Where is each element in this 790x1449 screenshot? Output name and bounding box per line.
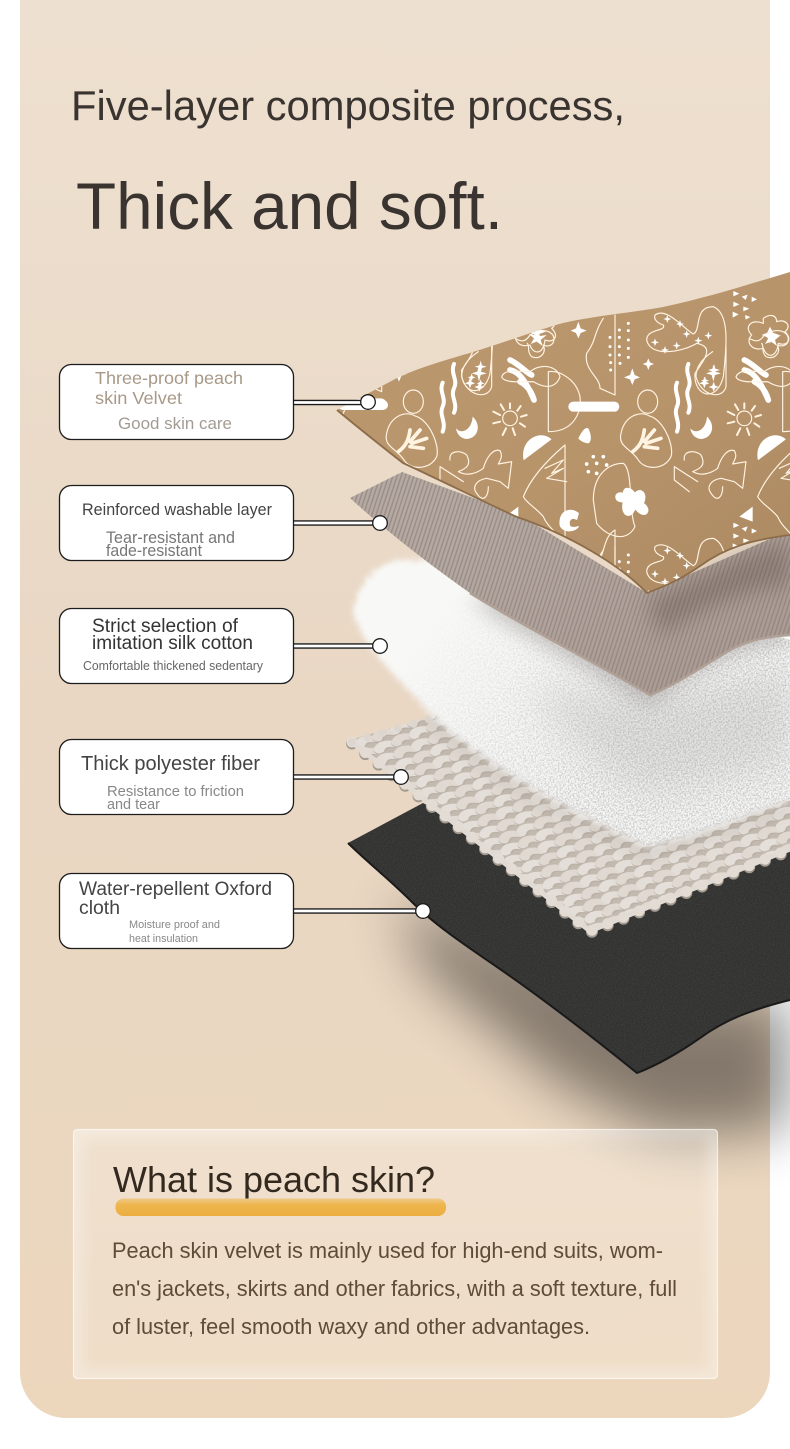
heading: What is peach skin?: [113, 1159, 435, 1200]
body copy: of luster, feel smooth waxy and other advantages.: [112, 1314, 590, 1339]
label card: silk cotton: Strict selection of: [92, 616, 239, 637]
label card: washable layer: Tear-resistant and: [106, 529, 235, 547]
layer 3: imitation silk cotton: [350, 555, 790, 850]
label card: Oxford cloth: heat insulation: [129, 933, 198, 945]
connector 4: [293, 770, 408, 784]
title: Thick and soft.: [76, 169, 503, 243]
layer 4: thick polyester knit: [350, 713, 790, 933]
cast shadow: [395, 900, 790, 1135]
body copy: en's jackets, skirts and other fabrics, with a soft texture, full: [112, 1276, 677, 1301]
label card: polyester fiber: Thick polyester fiber: [81, 753, 260, 775]
label card: silk cotton: imitation silk cotton: [92, 633, 253, 654]
label card: Oxford cloth: Water-repellent Oxford: [79, 879, 272, 900]
label card: silk cotton: Comfortable thickened sedentary: [83, 658, 263, 673]
heading underline: [116, 1198, 446, 1216]
connector 3: [293, 639, 387, 653]
label card: peach skin velvet: [60, 364, 294, 440]
five-layer fabric stack: [336, 272, 790, 1170]
label card: Oxford cloth: Moisture proof and: [129, 919, 220, 931]
label card: Oxford cloth: cloth: [79, 898, 120, 919]
connector 1: [293, 395, 375, 409]
label card: peach skin velvet: skin Velvet: [95, 388, 182, 408]
label card: polyester fiber: and tear: [107, 797, 160, 813]
connector 2: [293, 516, 387, 530]
label card: washable layer: fade-resistant: [106, 542, 202, 560]
layer 5: black Oxford cloth: [340, 800, 790, 1080]
label card: Oxford cloth: [60, 874, 294, 948]
title: Five-layer composite process,: [71, 82, 625, 129]
label card: peach skin velvet: Good skin care: [118, 415, 232, 433]
label card: washable layer: [60, 486, 294, 560]
label card: washable layer: Reinforced washable layer: [82, 501, 272, 519]
connector 5: [293, 904, 430, 918]
label card: polyester fiber: [60, 740, 294, 814]
glass panel: what is peach skin: [73, 1129, 718, 1379]
label card: polyester fiber: Resistance to friction: [107, 784, 244, 800]
label card: silk cotton: [60, 608, 294, 684]
title: [71, 82, 625, 243]
label card: peach skin velvet: Three-proof peach: [95, 368, 243, 388]
layer 2: reinforced washable layer: [350, 472, 790, 695]
body copy: [112, 1238, 677, 1339]
layer 1: three-proof peach skin velvet: [336, 272, 790, 594]
body copy: Peach skin velvet is mainly used for high-end suits, wom-: [112, 1238, 663, 1263]
